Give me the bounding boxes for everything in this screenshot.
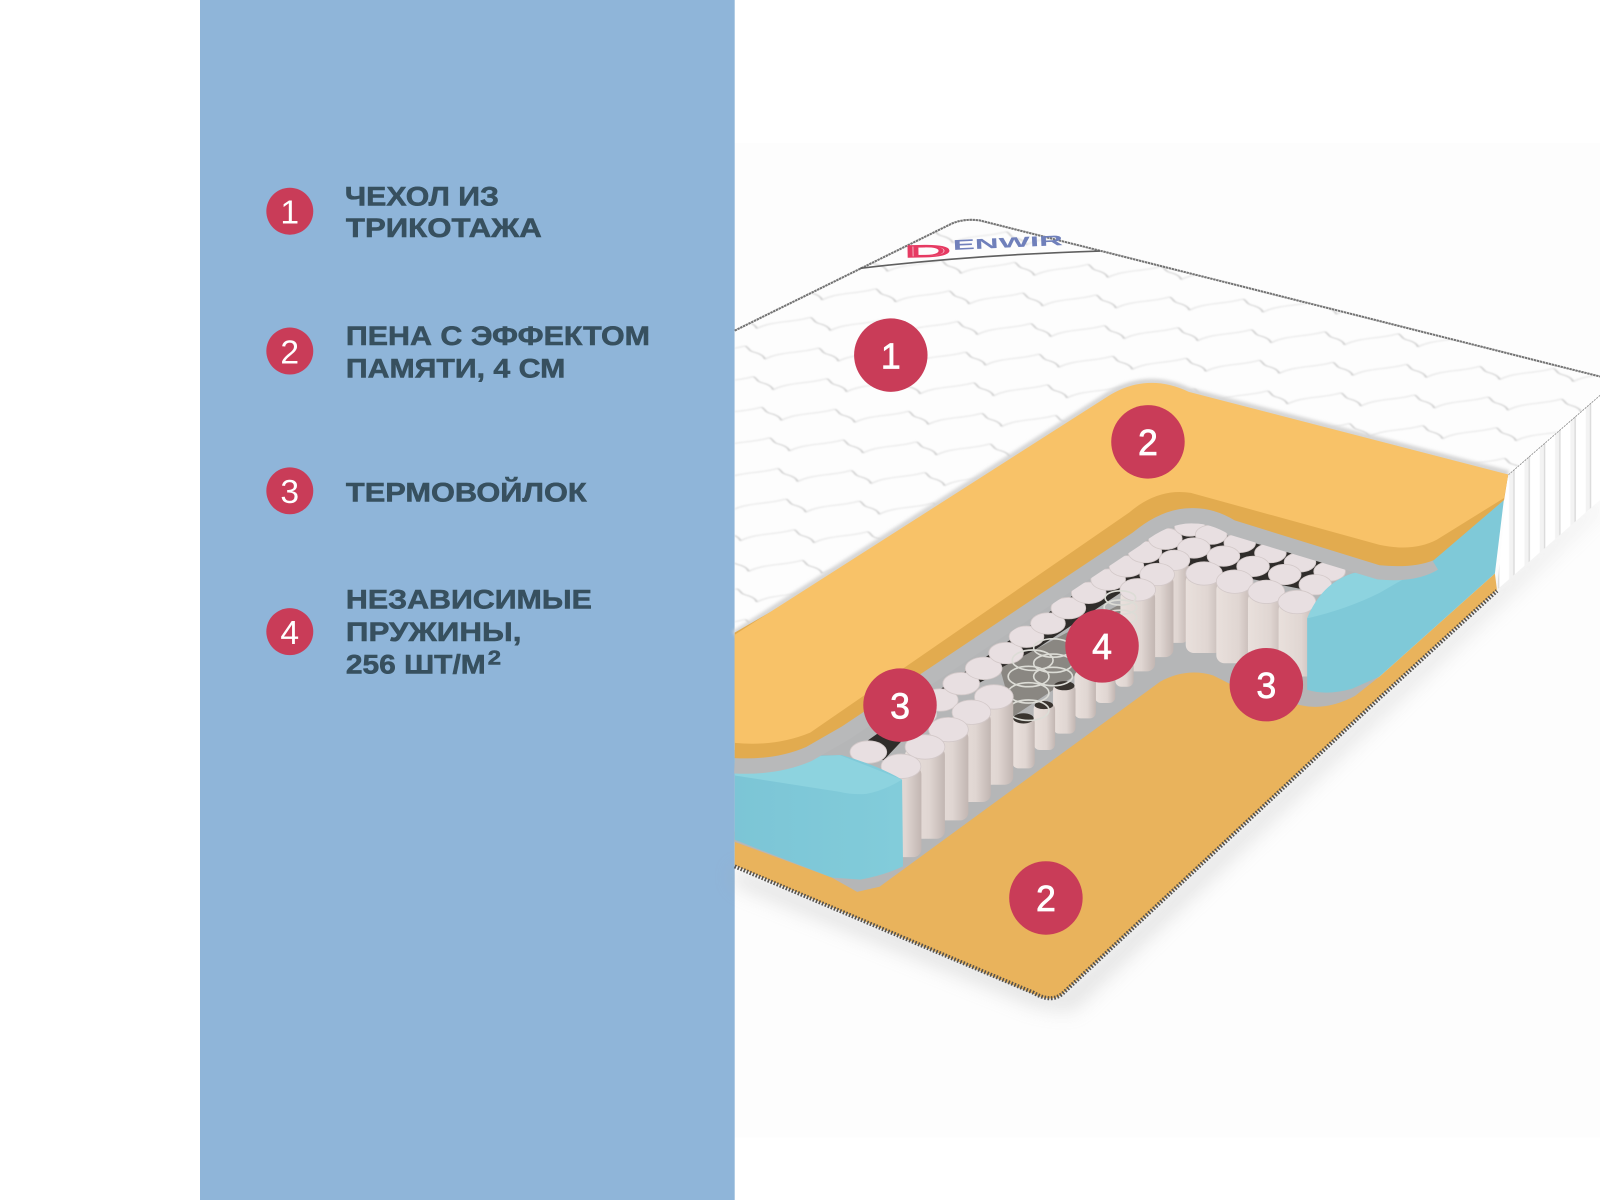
illustration: mattress cutaway [735,220,1600,1010]
right foam block [1307,498,1504,693]
legend item 1 [266,181,542,243]
legend item 2: 2 [280,334,299,371]
legend item 1: 1 [280,194,299,231]
callout 2: top foam [1111,405,1185,479]
legend item 2 [266,321,650,383]
logo flap: ENWIR [953,233,1065,254]
legend item 3 [266,467,587,514]
callout 3: left block [863,668,937,742]
panel: legend [200,0,735,1200]
left foam block [735,755,903,880]
legend item 1: ТРИКОТАЖА [346,213,542,243]
legend item 4: 4 [280,615,299,652]
top memory foam layer [735,383,1508,758]
mattress side panel [1497,395,1600,590]
back row spring tops [850,517,1345,763]
legend item 4 [266,584,592,679]
legend item 3: 3 [280,474,299,511]
callout 3: left block: 3 [890,686,910,726]
coil zone backing [1000,597,1134,716]
callout 3: right block: 3 [1256,666,1276,706]
logo flap: D [905,242,950,261]
soft seam along the foam cut [735,383,1508,635]
callout 2: bottom foam: 2 [1036,879,1056,919]
legend item 1: ЧЕХОЛ ИЗ [345,181,499,211]
wrapped springs, right run [1160,560,1189,643]
legend item 4: НЕЗАВИСИМЫЕ [346,584,592,614]
wrapped springs, front diagonal run [1140,574,1173,657]
legend item 4: 256 ШТ/М [346,649,486,679]
upper felt band [735,511,1432,761]
product photo backdrop [735,143,1600,1138]
bottom memory foam layer [735,573,1497,998]
dark gap behind spring tops [850,527,1340,760]
legend item 3: ТЕРМОВОЙЛОК [346,476,587,507]
callout 2: bottom foam [1009,861,1083,935]
legend item 2: ПЕНА С ЭФФЕКТОМ [346,321,650,351]
quilted top cover [735,220,1600,638]
callout 4: springs [1065,609,1139,683]
felt floor [735,510,1429,892]
logo flap [860,233,1100,268]
callout 1: cover [854,318,928,392]
callout 2: top foam: 2 [1138,423,1158,463]
callout 1: cover: 1 [881,336,901,376]
legend item 4: ПРУЖИНЫ, [346,617,521,647]
legend item 4: 2 [488,647,501,669]
mattress shadow [735,500,1600,1010]
pocket springs [850,517,1345,857]
legend item 2: ПАМЯТИ, 4 СМ [346,353,565,383]
callout 4: springs: 4 [1092,627,1112,667]
callout 3: right block [1230,648,1303,721]
exposed metal coils [1008,591,1137,720]
